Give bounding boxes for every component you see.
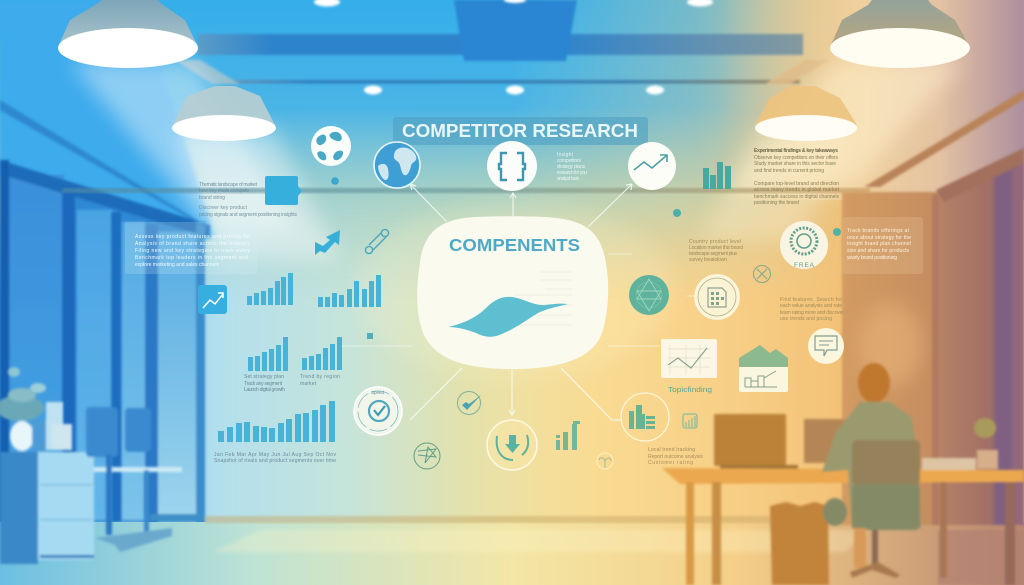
icon: green star circle [629,275,669,315]
text block: upper center: analyst task [557,176,580,182]
callout box: right text: insight brand plan channel [847,241,911,247]
icon: blue globe [374,142,420,188]
icon: blue zigzag arrow [315,230,340,255]
text block: mid right: Location market this brand [689,245,743,251]
cabinet [0,452,94,564]
text block: upper center: competitors [557,158,582,164]
callout box: right text [843,217,923,274]
caption: lower middle text: Local trend tracking [648,447,695,453]
icon: small chart outline [683,414,697,428]
icon: trend square [198,285,227,314]
callout box: left text: Analysis of brand share across the industry [135,241,250,247]
text block: upper center: research for you [557,170,587,176]
desk [662,468,1024,585]
office: right desk and person [662,363,1024,585]
icon: bars ring [621,393,669,441]
dot marker [833,228,841,236]
lamp second left [172,86,276,141]
lamps [58,0,970,141]
lamp second right [755,86,857,141]
ceiling spot lights [314,0,713,94]
text block: upper right: across many trends in global market [754,187,840,193]
chart 3 caption: Set strategy plan [244,374,284,380]
text block: upper center [557,152,587,182]
chart 5 caption: Snapshot of rivals and product segments over time [214,458,336,464]
text block: upper left: pricing signals and segment positioning insights [199,212,298,218]
text block: mid right [689,239,743,263]
plant [974,418,998,469]
left upper wall [0,0,215,240]
icon: white circle with trend arrow [628,142,676,190]
office: left furniture [0,367,182,564]
bar chart: teal [703,162,731,189]
icon: sprout [597,453,613,469]
light cones [70,60,965,260]
icon: document ring [695,275,739,319]
text block: lower right: use trends and pricing [780,316,832,322]
text block: upper left: brand string [199,195,225,201]
text block: upper left: Discover key product [199,205,248,211]
icon: small white globe [311,126,351,166]
chart 4 caption: market [300,381,317,387]
text block: upper right [754,148,840,206]
caption: lower middle text [648,447,704,466]
callout box: left text: Benchmark top leaders in the segment and [135,255,248,261]
bar chart 5 [218,401,335,442]
connector arrows [340,184,695,420]
chart 3 caption: Track any segment [244,381,283,387]
small square marker [367,333,373,339]
bar chart 3 [248,337,288,371]
text block: mid right: survey breakdown [689,257,727,263]
chart 3 caption: Launch digital growth [244,387,285,393]
text block: lower right: each value analysis and rate [780,303,842,309]
icon: check clock circle [354,387,402,435]
caption: lower middle text: Customer rating [648,460,693,466]
icon: white circle with bracket glyph [487,141,537,191]
callout box: right text: yearly brand positioning [847,255,897,261]
icon: gear badge with label [780,221,828,269]
text block: upper right: positioning the brand [754,200,799,206]
icon: small green ring [754,266,770,282]
title banner: COMPETITOR RESEARCH [402,120,638,141]
text block: upper left: how key rivals compete [199,188,249,194]
text block: mid right: landscape segment plus [689,251,738,257]
text block: lower right [780,297,844,322]
text block: upper right: benchmark success in digital channels [754,194,840,200]
callout box: left text: Filing new and key strategies to track every [135,248,250,254]
long horizontal rail [62,188,870,193]
icon: download ring [487,420,537,470]
card: line chart [661,339,717,378]
center glow [355,200,675,380]
laptop [714,414,798,470]
chart 4 caption: Trend by region [300,374,340,380]
icon: gear badge with label: FREA [794,262,815,269]
dot marker [331,177,339,185]
callout box: right text: once about strategy for the [847,235,911,241]
left windows [0,100,210,526]
chart 5 caption: Jan Feb Mar Apr May Jun Jul Aug Sep Oct Nov [214,452,336,458]
panel wave chart [448,297,568,337]
dot marker [673,209,681,217]
text block: upper right: Compare top-level brand and direction [754,181,839,187]
text block: mid right: Country product level [689,239,741,245]
icon: small green bars [556,421,580,450]
person: head [858,363,890,403]
icon: blue tag [265,176,302,205]
center panel: components [417,216,608,369]
bar chart 1 [247,273,293,305]
caption: lower middle text: Report outcome analysis [648,454,704,460]
text block: lower right: team rating more and discover [780,310,844,316]
icon: speech bubble circle [808,328,844,364]
callout box: left text: Assess key product features and pricing for [135,234,250,240]
bar chart 4 [302,337,342,370]
bag [770,502,829,585]
icon: check clock circle: Speed [371,390,385,395]
text block: upper left [199,182,298,218]
chart 4 caption [300,374,340,387]
text block: upper right: and find trends in current pricing [754,168,824,174]
person: torso [822,402,921,528]
card: mountain chart [739,345,788,392]
lamp top left [58,0,198,68]
lamp top right [830,0,970,68]
text block: upper center: Insight [557,152,574,158]
icon: check mark [458,392,481,414]
text block: upper left: Thematic landscape of market [199,182,258,188]
text block: upper right: Observe key competitors on their offers [754,155,838,161]
callout box: left text [125,222,257,274]
chart 5 caption [214,452,336,464]
right wall [842,90,1024,585]
title banner [393,117,648,145]
chairs and desk [86,407,182,552]
panel faint lines [510,272,572,325]
callout box: right text: Track brands offerings at [847,228,910,234]
chart 3 caption [244,374,285,393]
floor [0,522,1024,585]
callout box: right text: size and share for products [847,248,910,254]
callout box: left text: explore marketing and sales channels [135,262,220,268]
text block: upper center: strategy plans [557,164,586,170]
text block: upper right: Experimental findings & key takeaways [754,148,838,154]
icon: wrench link [365,229,389,254]
icon: green network [414,443,440,469]
bar chart 2 [318,275,381,307]
text block: lower right: Find features. Search for [780,297,842,303]
panel heading: COMPENENTS [449,235,580,255]
icon: plant in vase [0,367,46,451]
ceiling beams and center box [175,0,830,84]
card caption: Topicfinding [668,387,712,394]
text block: upper right: Study market share in this sector base [754,161,836,167]
